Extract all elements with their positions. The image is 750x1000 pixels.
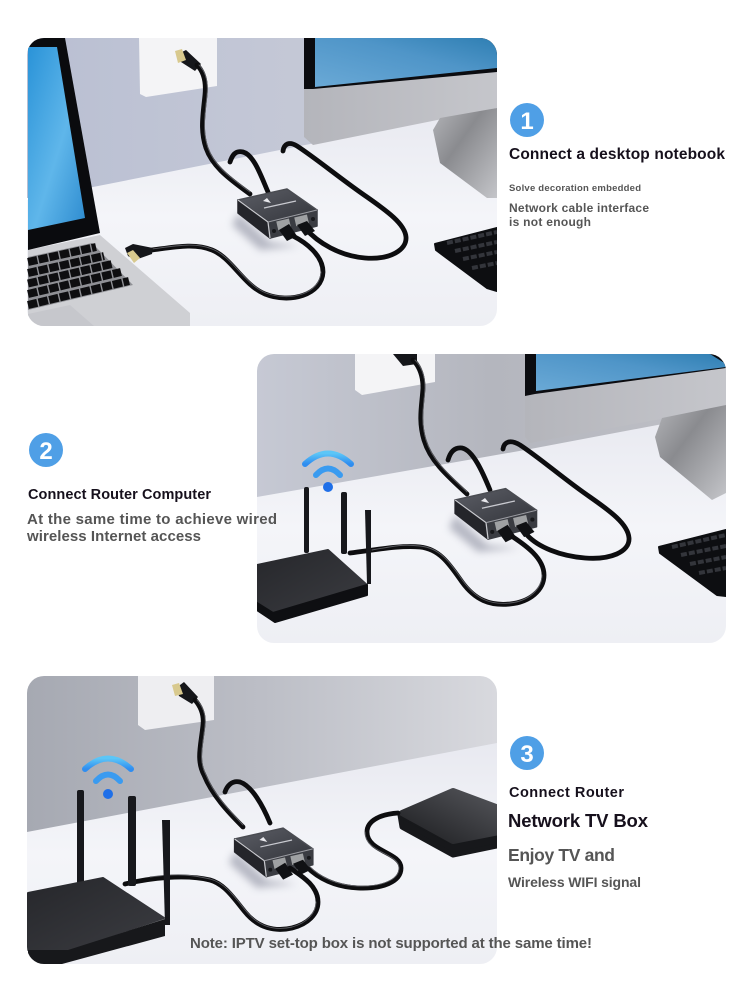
step 1 subtitle: Solve decoration embedded [509,183,641,194]
wall cable plug [175,49,201,71]
step 3 badge: 3 [520,741,534,768]
router antennas [77,790,170,925]
desk surface [27,107,497,326]
laptop cable plug [125,244,153,263]
step 2 text block [26,433,277,545]
panel 1: desktop and notebook photo [27,38,497,326]
wall socket plate [139,38,217,97]
router to adapter cable [350,537,544,604]
adapter shadow [449,515,520,552]
step 3 title line 1: Connect Router [509,785,624,801]
router to adapter cable [125,868,318,929]
laptop [28,38,190,326]
TV box cable [307,813,401,888]
router antennas [304,487,371,584]
keyboard [659,530,726,596]
note about IPTV: Note: IPTV set-top box is not supported at the same time! [190,935,592,952]
splitter adapter [238,189,317,241]
step 3 description line 1: Enjoy TV and [508,845,615,865]
step 1 description line 1: Network cable interface [509,201,649,215]
wifi icon [85,758,131,799]
adapter shadow [232,213,300,250]
step 3 text block [508,736,649,890]
router [257,550,367,622]
adapter shadow [229,851,297,888]
wall [257,354,726,497]
step 2 description line 1: At the same time to achieve wired [27,511,277,528]
wall [27,676,497,836]
monitor stand [433,108,497,198]
splitter adapter [235,828,313,880]
step 1 text block [509,103,725,229]
step 1 badge [510,103,544,137]
step 2 badge: 2 [39,438,53,465]
TV box [400,791,499,855]
step 2 title: Connect Router Computer [28,487,211,503]
wall cable [413,360,467,494]
wall socket plate [138,676,214,730]
wall cable [195,700,243,827]
step 2 badge [29,433,63,467]
wall [27,38,312,198]
monitor stand [655,405,726,500]
splitter adapter [455,489,537,542]
step 1 title: Connect a desktop notebook [509,146,725,163]
keyboard [435,228,497,291]
wall cable plug [172,682,198,704]
step 3 description line 2: Wireless WIFI signal [508,874,641,890]
step 1 badge: 1 [520,108,534,135]
wifi icon [305,454,351,492]
desk surface [27,743,497,964]
laptop to adapter cable [152,236,323,298]
wall cable [197,65,250,194]
panel 2: router and computer photo [257,354,726,643]
wall socket plate [355,354,435,395]
wall cable plug [393,354,417,366]
rear cables [448,442,629,558]
monitor [525,354,726,396]
router [28,878,165,964]
step 3 title line 2: Network TV Box [508,810,649,831]
step 3 badge [510,736,544,770]
panel 3: router and TV box photo [27,676,499,964]
desk surface [257,412,726,643]
rear cable [225,782,270,823]
rear cables [230,144,406,258]
step 1 description line 2: is not enough [509,215,591,229]
step 2 description line 2: wireless Internet access [26,528,201,545]
monitor [304,38,497,145]
